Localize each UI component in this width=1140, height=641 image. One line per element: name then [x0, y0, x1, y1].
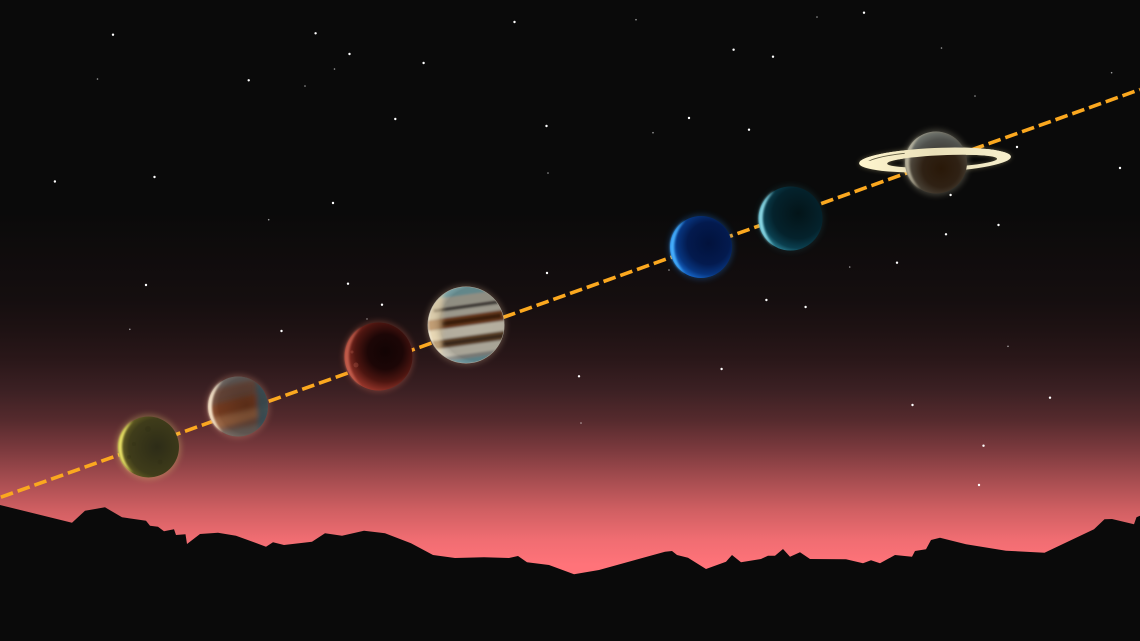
planet: Neptune — [668, 214, 734, 280]
planet: Venus — [205, 368, 272, 442]
planet: Mercury — [116, 414, 181, 480]
mountain silhouette — [0, 505, 1140, 641]
planet: Jupiter — [424, 282, 508, 368]
rear ring arc — [859, 145, 1011, 175]
planet: Uranus — [757, 185, 824, 252]
planet: Mars — [343, 321, 414, 392]
planet: Saturn with rings — [859, 130, 1011, 196]
ring glow — [859, 145, 1011, 175]
ring shadow gap — [887, 153, 997, 170]
front ring arc over planet — [860, 148, 1010, 162]
dashed alignment line — [0, 90, 1140, 498]
stars — [54, 12, 1121, 486]
